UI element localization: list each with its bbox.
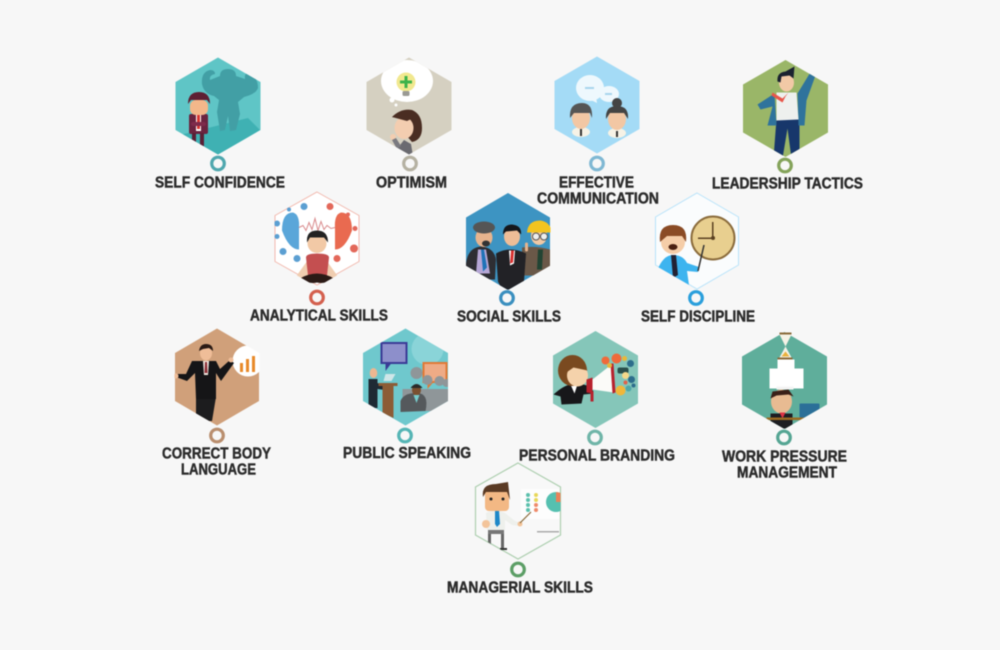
label: managerial skills: MANAGERIAL SKILLS (447, 580, 593, 596)
skill: optimism (366, 58, 452, 192)
skill: correct body language (162, 328, 272, 478)
label: work pressure management: WORK PRESSURE (722, 448, 847, 466)
skill: work pressure management (722, 332, 847, 482)
label: public speaking: PUBLIC SPEAKING (343, 445, 471, 462)
label: correct body language (162, 446, 272, 478)
ring: correct body language (211, 429, 223, 442)
label: optimism: OPTIMISM (376, 174, 447, 192)
ring: personal branding (589, 431, 601, 444)
label: work pressure management: MANAGEMENT (737, 464, 837, 482)
icon: self confidence hexagon (176, 58, 260, 156)
icon: effective communication hexagon (554, 56, 640, 154)
label: work pressure management (722, 448, 847, 482)
skill: public speaking (343, 328, 471, 462)
skill: social skills (457, 193, 561, 326)
skill: self confidence (155, 58, 285, 192)
skill: leadership tactics (712, 60, 863, 192)
ring: analytical skills (311, 291, 323, 304)
ring: managerial skills (512, 563, 524, 576)
label: analytical skills: ANALYTICAL SKILLS (250, 308, 388, 324)
ring: optimism (404, 157, 416, 170)
ring: work pressure management (778, 431, 790, 444)
label: correct body language: LANGUAGE (181, 462, 256, 478)
icon: leadership tactics hexagon (743, 60, 828, 158)
icon: work pressure management hexagon (742, 332, 827, 429)
ring: leadership tactics (779, 159, 791, 172)
skill: personal branding (519, 331, 675, 464)
ring: effective communication (591, 157, 603, 170)
ring: self discipline (690, 292, 702, 304)
skill: self discipline (641, 193, 755, 326)
infographic: leadership skills hexagon grid (154, 56, 864, 594)
ring: self confidence (212, 157, 224, 170)
icon: social skills hexagon (466, 193, 552, 290)
label: effective communication: COMMUNICATION (537, 190, 659, 208)
ring: public speaking (399, 429, 411, 442)
label: effective communication (537, 174, 659, 208)
icon: optimism hexagon (366, 58, 452, 156)
label: correct body language: CORRECT BODY (162, 446, 272, 462)
icon: public speaking hexagon (363, 328, 450, 426)
ring: social skills (501, 292, 513, 304)
skill: effective communication (537, 56, 659, 208)
icon detail: hourglass on top of the stack (778, 332, 792, 360)
icon: correct body language hexagon (174, 328, 264, 426)
label: effective communication: EFFECTIVE (559, 174, 634, 192)
label: self discipline: SELF DISCIPLINE (641, 308, 755, 326)
label: leadership tactics: LEADERSHIP TACTICS (712, 176, 863, 192)
label: self confidence: SELF CONFIDENCE (155, 174, 285, 192)
icon: personal branding hexagon (553, 331, 638, 428)
icon: managerial skills hexagon (476, 463, 566, 559)
label: social skills: SOCIAL SKILLS (457, 308, 561, 326)
skill: managerial skills (447, 463, 593, 596)
skill: analytical skills (250, 192, 388, 324)
label: personal branding: PERSONAL BRANDING (519, 448, 675, 464)
icon: self discipline hexagon (656, 193, 738, 289)
icon: analytical skills hexagon (274, 192, 359, 285)
